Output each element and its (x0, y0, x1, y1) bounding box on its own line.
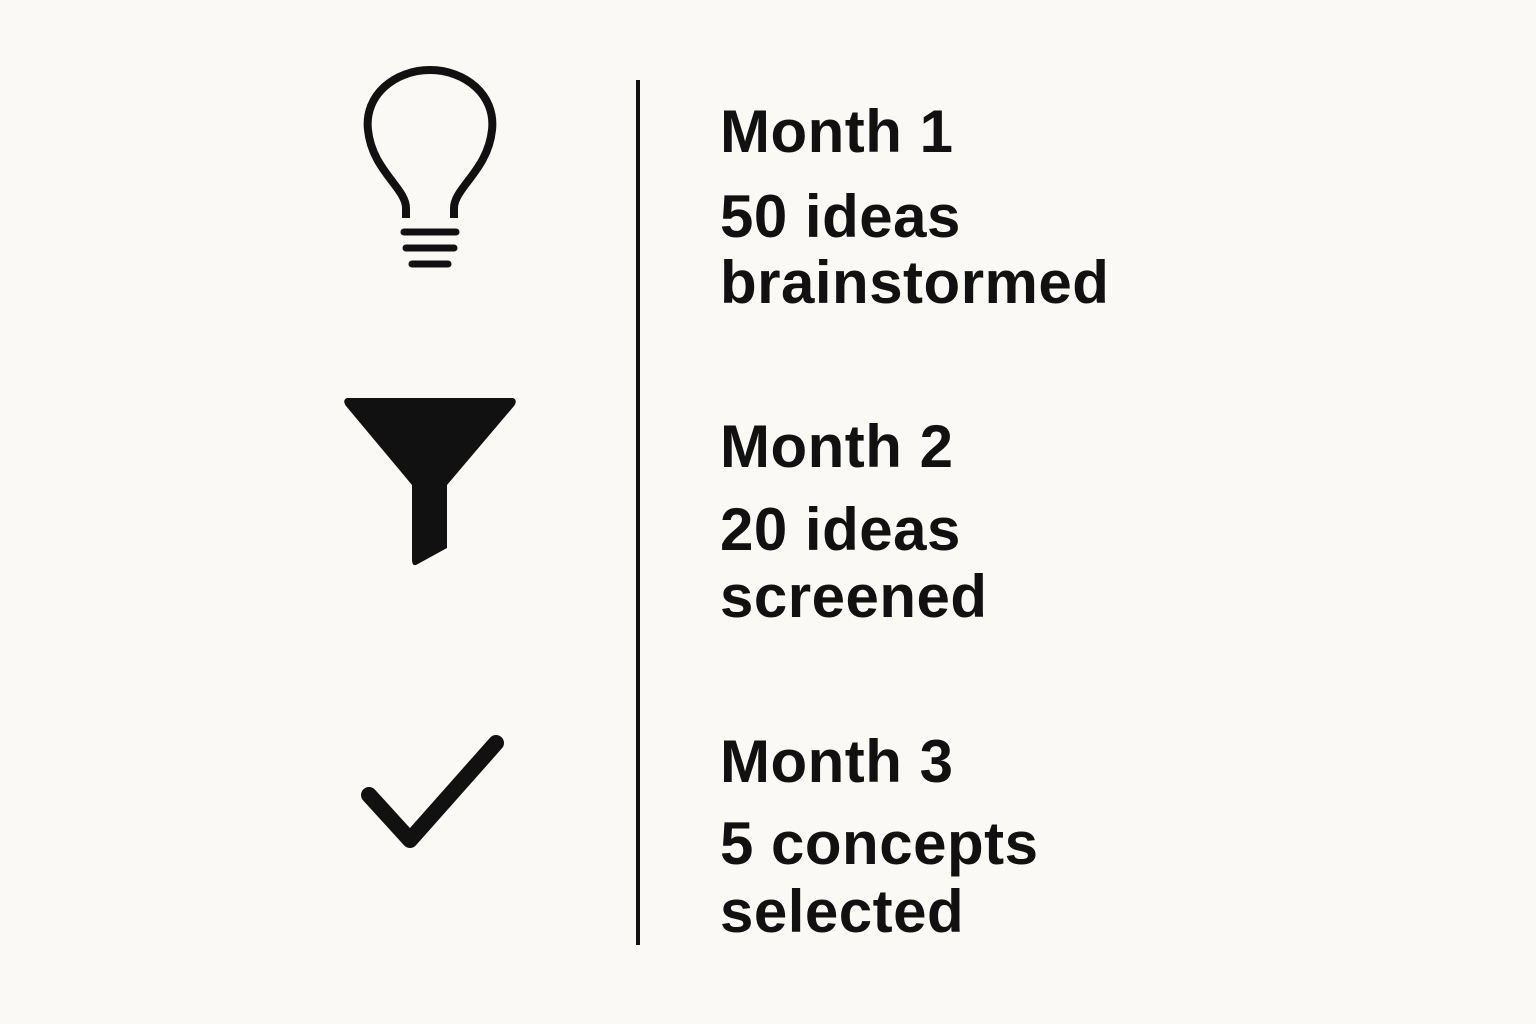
timeline line (636, 80, 640, 945)
text block: month 2: Month 2 (720, 413, 953, 480)
text block: month 3 (720, 728, 1038, 945)
text block: month 1: Month 1 (720, 98, 953, 165)
text block: month 1: brainstormed (720, 249, 1109, 316)
icon: funnel (344, 398, 516, 566)
icon: light bulb (364, 66, 496, 268)
text block: month 1: 50 ideas (720, 183, 961, 250)
text block: month 3: Month 3 (720, 728, 953, 795)
text block: month 2: 20 ideas (720, 496, 961, 563)
icon: checkmark (361, 735, 504, 848)
text block: month 2: screened (720, 563, 988, 630)
text block: month 1 (720, 98, 1109, 316)
text block: month 2 (720, 413, 988, 630)
text block: month 3: 5 concepts (720, 810, 1038, 877)
text block: month 3: selected (720, 878, 964, 945)
